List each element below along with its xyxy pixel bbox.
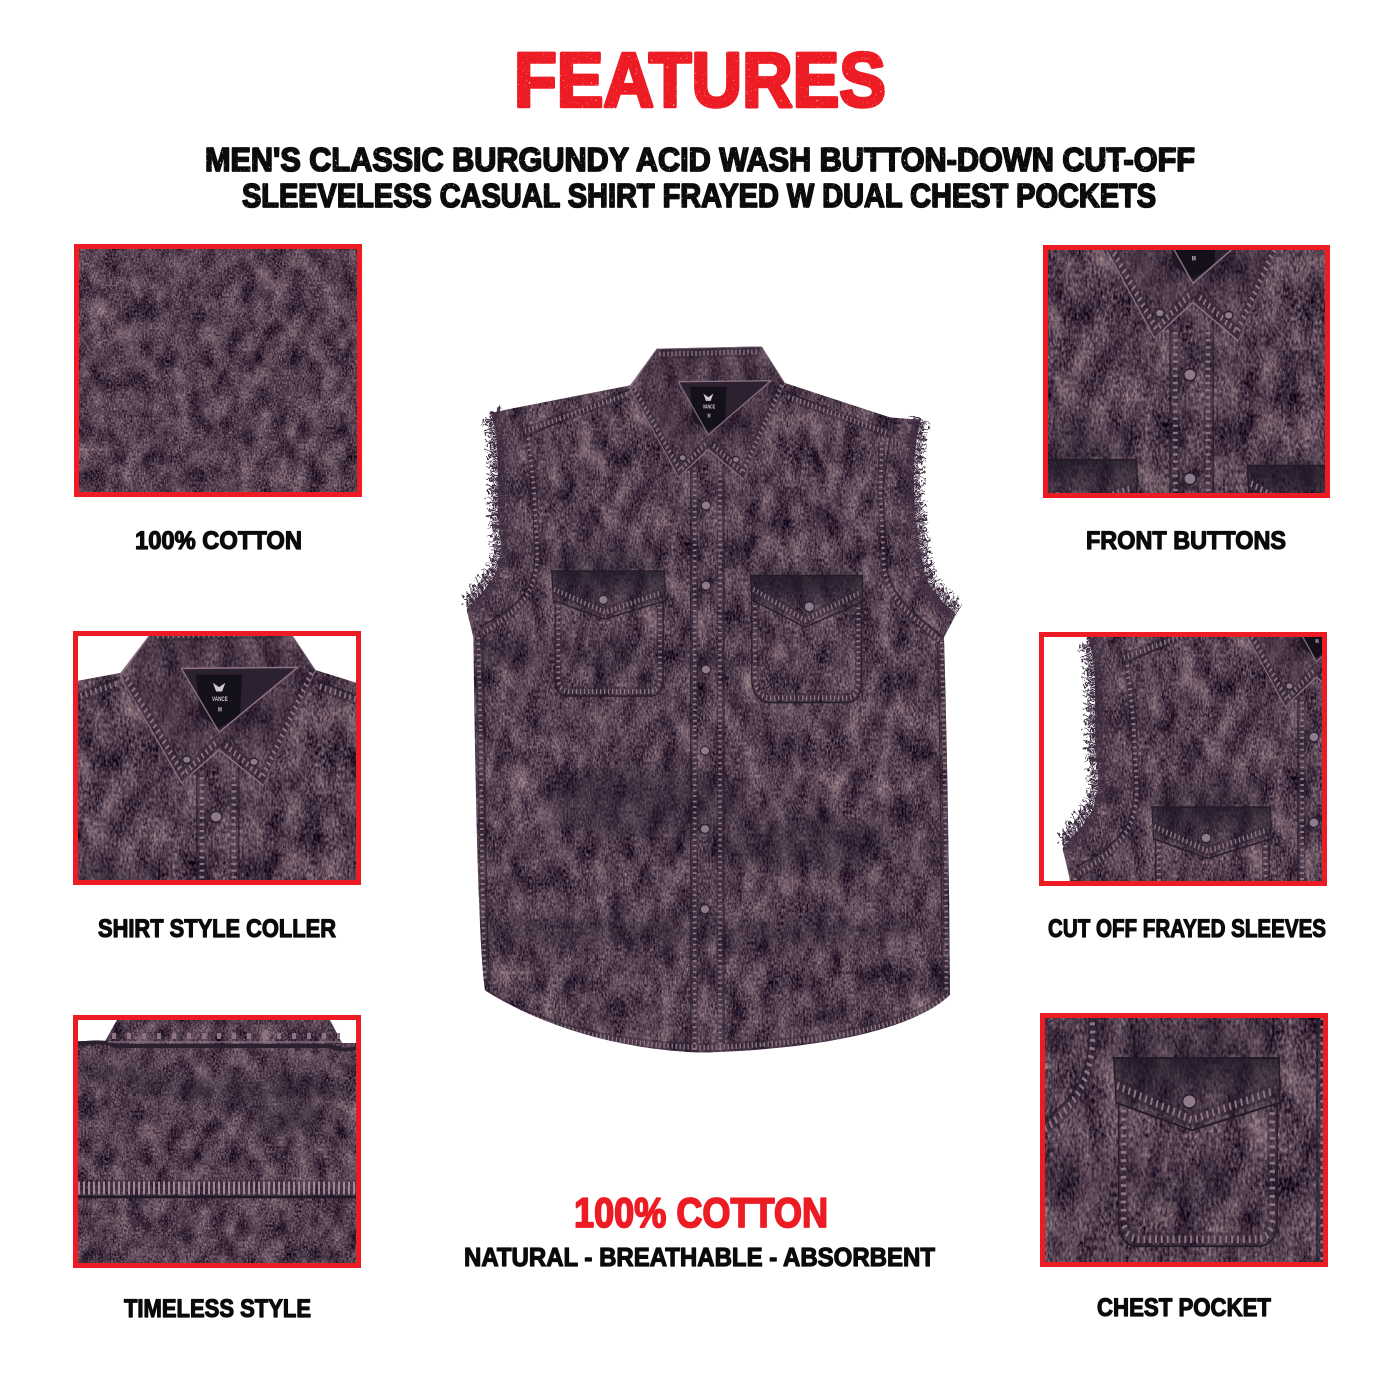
panel: 100% cotton	[74, 244, 362, 497]
label: chest pocket: CHEST POCKET	[1097, 1294, 1271, 1322]
panel: front buttons	[1043, 245, 1330, 498]
panel: chest pocket	[1040, 1013, 1328, 1267]
subtitle: MEN'S CLASSIC BURGUNDY ACID WASH BUTTON-DOWN CUT-OFF	[205, 141, 1195, 178]
subtitle	[205, 141, 1195, 214]
label: 100% cotton: 100% COTTON	[135, 527, 302, 555]
callout: 100% cotton	[464, 1189, 935, 1272]
panel: timeless style	[73, 1015, 361, 1268]
callout: 100% cotton: 100% COTTON	[574, 1189, 828, 1236]
label: shirt style coller: SHIRT STYLE COLLER	[98, 915, 336, 943]
title: FEATURES	[514, 38, 886, 124]
panel: shirt style collar	[73, 631, 361, 885]
main shirt photo	[461, 346, 962, 1053]
callout: 100% cotton: NATURAL - BREATHABLE - ABSORBENT	[464, 1242, 935, 1272]
label: timeless style: TIMELESS STYLE	[124, 1295, 311, 1323]
label: front buttons: FRONT BUTTONS	[1086, 527, 1286, 555]
subtitle: SLEEVELESS CASUAL SHIRT FRAYED W DUAL CHEST POCKETS	[242, 177, 1156, 214]
label: cut off frayed sleeves: CUT OFF FRAYED SLEEVES	[1048, 915, 1326, 943]
panel: cut off frayed sleeves	[1039, 632, 1327, 886]
